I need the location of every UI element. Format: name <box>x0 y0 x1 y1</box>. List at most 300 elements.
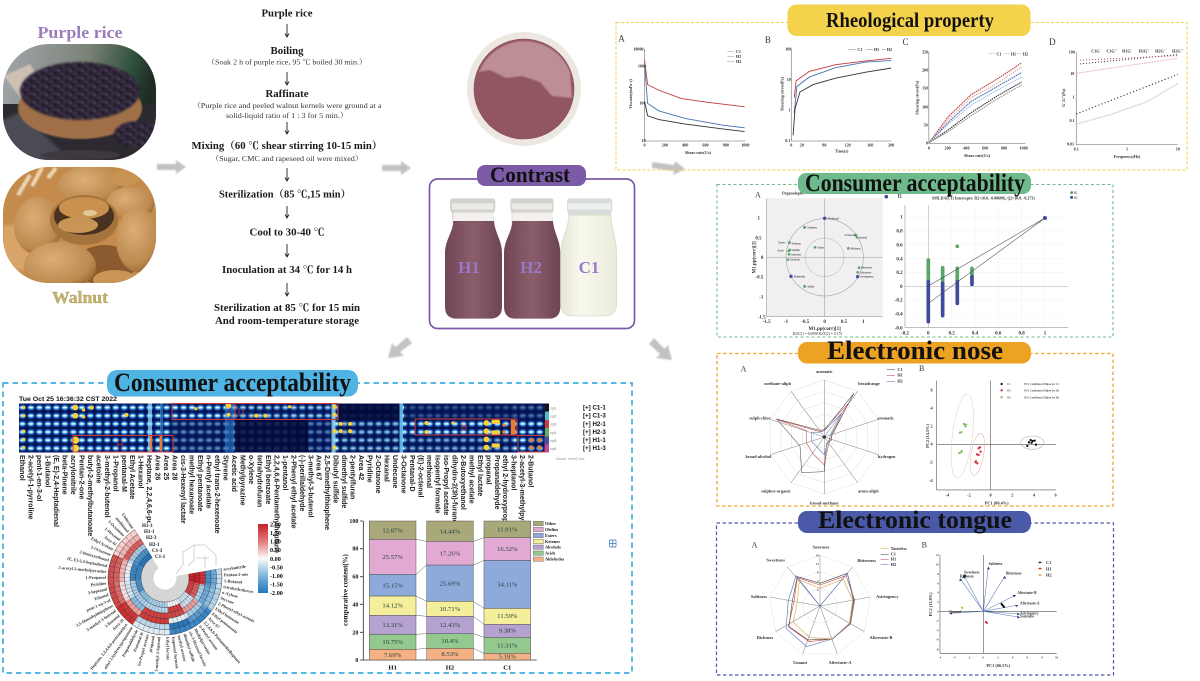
bar value labels: 11.91% <box>497 526 518 533</box>
compound labels around ring: ethyl 2-hydroxypropanoate <box>103 625 134 670</box>
compound labels around ring: methional <box>115 516 131 534</box>
compound labels around ring: propanal <box>148 635 156 653</box>
chart A: viscosity: 10 <box>642 138 646 143</box>
compound labels around ring: Ethyl Acetate <box>90 536 115 552</box>
biplot B: taste PCA: 2 <box>937 600 939 604</box>
colour scale: -2.00 <box>270 590 283 597</box>
sample colour key: spl1 <box>550 406 556 410</box>
compound labels around ring: Ethyl benzoate <box>214 606 240 625</box>
chart B: shearing stress over time: 160 <box>867 143 873 148</box>
scatter plot A: loading plot: -1.5 <box>763 320 771 325</box>
biplot B: taste PCA: -2 <box>968 655 971 659</box>
bar value labels: 16.32% <box>497 546 518 553</box>
compound names under heat map: n-Pentyl acetate <box>204 455 212 509</box>
bar value labels: 14.44% <box>440 528 461 535</box>
compound names under heat map: Hexanal <box>383 455 390 482</box>
chart C: shearing stress over shear rate: 50 <box>924 122 928 127</box>
biplot B: taste PCA: Umami <box>949 610 961 614</box>
colour scale: 0.50 <box>270 547 281 554</box>
colour scale: -1.50 <box>270 582 283 589</box>
compound names under heat map: pent-1-en-3-ol <box>35 455 42 501</box>
arrow: product to rheology <box>652 161 685 175</box>
compound labels around ring: 2-Butanol <box>104 613 121 629</box>
compound names under heat map: tetrahydrofuran <box>255 455 262 507</box>
radar chart A: taste profile: A <box>752 541 758 550</box>
chart C: shearing stress over shear rate: H1 <box>1011 51 1016 56</box>
compound names under heat map: 2-Butoxyethanol <box>459 455 466 510</box>
panel: consumer acceptability, multivariate plots <box>717 170 1113 337</box>
radar chart A: sensor responses: arom-aliph <box>858 488 879 493</box>
scatter plot B: permutation test: 1 <box>900 216 903 221</box>
colour scale: -1.00 <box>270 573 283 580</box>
chart A: viscosity: 400 <box>682 143 688 148</box>
biplot B: taste PCA: Saltiness <box>989 562 1003 566</box>
compound names under heat map: iso-Propyl acetate <box>442 455 449 515</box>
scatter plot B: nose PCA: B <box>919 364 924 373</box>
step: raffinate: solid-liquid ratio of 1 : 3 for 5 min.） <box>226 111 348 120</box>
compound labels around ring: n-Pentyl acetate <box>198 624 219 651</box>
biplot B: taste PCA: -6 <box>936 638 939 642</box>
sample labels: [+] C1-1 <box>583 404 606 412</box>
chart C: shearing stress over shear rate: 200 <box>945 145 951 150</box>
legend: Olefins <box>545 527 559 532</box>
chart C: shearing stress over shear rate: 100 <box>922 104 928 109</box>
scatter plot B: permutation test: 0.4 <box>896 257 903 262</box>
biplot B: taste PCA: H2 <box>1046 573 1051 578</box>
compound names under heat map: Pyridine <box>366 455 373 483</box>
bar value labels: 9.38% <box>499 628 516 635</box>
radar chart A: sensor responses <box>741 365 903 505</box>
flow chart: processing steps <box>192 8 382 327</box>
step: boiling <box>207 46 367 66</box>
sample colour key: Attach: time/2 line <box>556 457 585 461</box>
radar chart A: sensor responses: H1 <box>897 373 903 378</box>
step: raffinate: （Purple rice and peeled walnut kernels were ground at a <box>192 101 382 110</box>
chart A: viscosity: 1000 <box>741 143 749 148</box>
compound names under heat map: 2-pentylfuran <box>349 455 356 499</box>
axes: 80 <box>352 547 358 553</box>
compound labels around ring: 2-Phenyl ethyl acetate <box>217 601 256 624</box>
scatter plot B: nose PCA: 6 <box>1055 492 1058 497</box>
biplot B: taste PCA: 0 <box>937 609 939 613</box>
bar value labels: 25.57% <box>382 554 403 561</box>
chart B: shearing stress over time: 100 <box>785 46 791 51</box>
chart C: shearing stress over shear rate: C1 <box>997 51 1002 56</box>
radar chart A: taste profile: C1 <box>891 552 896 557</box>
compound names under heat map: beta-Pinene <box>60 455 67 495</box>
sector group: right end <box>102 515 228 641</box>
legend: Ketones <box>545 539 560 544</box>
bottle H1 <box>445 198 502 319</box>
radar chart A: sensor responses: broad-methane <box>810 500 839 505</box>
step: boiling: （Soak 2 h of purple rice, 95 ℃ boiled 30 min.） <box>207 58 367 66</box>
scatter plot B: permutation test: R2 <box>1074 192 1078 195</box>
compound names under heat map: 2,5-Dimethylthiophene <box>323 455 330 530</box>
sample ring labels: C1-1 <box>155 555 166 560</box>
scatter plot B: permutation test: -0.2 <box>901 332 909 337</box>
biplot B: taste PCA: Sweetness <box>964 571 980 575</box>
compound labels around ring: 1-Propanol <box>86 575 107 580</box>
bottle C1 <box>561 198 617 316</box>
biplot B: taste PCA: C1 <box>1046 560 1051 565</box>
compound labels around ring: Heptane, 2,2,4,6,6-pentamethyl- <box>89 621 129 671</box>
radar chart A: sensor responses: sulph-chlor <box>749 415 771 420</box>
compound names under heat map: methyl acetate <box>467 455 474 504</box>
scatter plot B: nose PCA: H1 <box>1007 389 1011 392</box>
scatter plot A: loading plot: Umami <box>859 236 867 239</box>
compound names under heat map: Acetic acid <box>230 455 237 492</box>
compound names under heat map: ethyl trans-2-hexenoate <box>213 455 220 534</box>
chart C: shearing stress over shear rate: 250 <box>922 49 928 54</box>
scatter plot A: loading plot: 0 <box>761 256 764 261</box>
chart A: viscosity: 600 <box>702 143 709 148</box>
step: final sterilization and storage: And room-temperature storage <box>215 316 359 327</box>
scatter plot A: loading plot: Richness <box>851 247 861 250</box>
compound labels around ring: Ethyl lactate <box>165 637 171 660</box>
step: raffinate: Raffinate <box>266 89 309 100</box>
compound names under heat map: Ethyl pentanoate <box>196 455 203 512</box>
chart D: modulus over frequency: D <box>1049 37 1056 47</box>
radar chart A: taste profile: Sweetness <box>766 557 785 562</box>
step: purple rice: Purple rice <box>262 8 313 20</box>
arrow: step down <box>285 206 289 218</box>
sample ring labels: H1-3 <box>142 524 153 529</box>
radar chart A: taste profile: 0 <box>817 588 819 592</box>
scatter plot B: nose PCA: 95% Confidence Ellipse for H1 <box>1024 389 1060 392</box>
radar chart A: taste profile: H1 <box>891 557 896 562</box>
compound labels around ring: Area 67 <box>207 616 221 630</box>
sample colour key: spl3 <box>550 422 556 426</box>
axes <box>340 519 537 671</box>
legend: Esters <box>545 533 557 538</box>
chart D: modulus over frequency: C1G'' <box>1106 48 1117 53</box>
bottle labels: H2 <box>520 258 542 277</box>
compound names under heat map: acetoine <box>94 455 101 484</box>
scatter plot B: nose PCA: 4 <box>1033 492 1036 497</box>
compound labels around ring: Undecane <box>121 512 135 530</box>
biplot B: taste PCA: H1 <box>1046 566 1051 571</box>
biplot B: taste PCA: 4 <box>937 591 939 595</box>
arrow: product to right-hand panels <box>649 338 672 360</box>
heading: walnut: Walnut <box>52 288 109 307</box>
chart B: shearing stress over time: C1 <box>857 47 862 52</box>
arrow: step down <box>285 24 289 37</box>
panel: electronic nose <box>717 336 1113 506</box>
scatter plot B: permutation test: 0.6 <box>896 243 903 248</box>
chart C: shearing stress over shear rate: H2 <box>1023 51 1028 56</box>
radar chart A: sensor responses: sulphur-organic <box>761 488 791 493</box>
compound labels around ring: (E, E)-2,4-heptadienal <box>67 556 109 568</box>
sample labels: [+] H2-3 <box>583 429 606 436</box>
radar chart A: sensor responses: broad-alcohol <box>746 454 772 459</box>
bottle labels: C1 <box>579 258 599 277</box>
photo: bowl of product <box>467 32 581 146</box>
compound names under heat map: dimethyl sulfide <box>340 455 347 508</box>
bar value labels: 10.75% <box>382 639 403 646</box>
bar value labels: 11.31% <box>497 642 518 649</box>
compound names under heat map: Ethanol <box>18 455 25 481</box>
scatter plot B: permutation test: -0.4 <box>895 313 903 318</box>
compound labels around ring: methyl acetate <box>177 635 187 662</box>
chart A: viscosity: 100 <box>639 101 646 106</box>
scatter plot B: permutation test: 0.8 <box>1019 332 1025 337</box>
chart D: modulus over frequency: 0.1 <box>1074 146 1079 151</box>
arrow: step down <box>285 122 289 134</box>
axes: 60 <box>352 575 358 581</box>
circular heat map <box>58 502 283 672</box>
arrow: step down <box>285 168 289 181</box>
scatter plot A: loading plot: Ketones <box>792 242 801 245</box>
bar value labels: 11.59% <box>497 613 518 620</box>
scatter plot B: nose PCA: 2 <box>1011 492 1013 497</box>
chart D: modulus over frequency: H1G' <box>1122 48 1132 53</box>
compound names under heat map: Styrene <box>222 455 228 481</box>
sample ring labels: H2-1 <box>149 543 160 548</box>
scatter plot B: permutation test: 1 <box>1044 332 1047 337</box>
compound names under heat map: Dibutyl sulfide <box>332 455 339 503</box>
compound names under heat map: Ethyl lactate <box>476 455 483 496</box>
scatter plot B: permutation test: 0.6 <box>995 332 1002 337</box>
chart B: shearing stress over time: 0.1 <box>785 138 790 143</box>
legend: Alcohols <box>545 545 561 550</box>
biplot B: taste PCA: 8 <box>937 572 939 576</box>
bar value labels: 34.11% <box>497 581 518 588</box>
compound names under heat map: Ethyl Acetate <box>128 455 135 499</box>
chart D: modulus over frequency: 10 <box>1176 146 1180 151</box>
sample ring labels <box>142 524 166 560</box>
compound names under heat map: Area 67 <box>315 455 322 480</box>
step: final sterilization and storage <box>214 302 360 327</box>
compound labels around ring: 3-methyl-2-butenol <box>154 636 161 672</box>
sample ring labels: H2-3 <box>146 536 157 541</box>
biplot B: taste PCA: -4 <box>936 628 939 632</box>
scatter plot A: loading plot <box>753 190 888 336</box>
charts: rheology curves <box>618 33 1183 159</box>
compound names under heat map: Undecane <box>391 455 398 489</box>
compound names under heat map: Pentan-2-one <box>77 455 84 499</box>
scatter plot A: loading plot: Alcohols <box>790 259 800 262</box>
radar chart A: taste profile: 12 <box>816 562 819 566</box>
legend <box>533 521 565 562</box>
radar chart A: sensor responses: broadrange <box>858 381 880 386</box>
axes: C1 <box>503 664 511 671</box>
scatter plot A: loading plot: 0.5 <box>841 320 848 325</box>
biplot B: taste PCA: 0 <box>983 655 985 659</box>
colour scale: -0.50 <box>270 564 283 571</box>
chart D: modulus over frequency: 1 <box>1072 95 1075 100</box>
bar value labels: 12.43% <box>440 622 461 629</box>
chart A: viscosity: A <box>618 33 625 43</box>
compound names under heat map: Area 42 <box>357 455 364 480</box>
scatter plot A: loading plot: Sweetness <box>845 234 856 237</box>
compound labels around ring: Pentanal-D <box>132 631 144 653</box>
scatter plot B: nose PCA: -2 <box>967 492 971 497</box>
scatter plot B: nose PCA: 6 <box>930 387 933 392</box>
chart B: shearing stress over time: B <box>765 35 771 45</box>
gallery plot: GC-IMS fingerprint heat map <box>19 403 545 453</box>
bottle labels: H1 <box>458 258 480 277</box>
chart D: modulus over frequency: H2G' <box>1155 48 1165 53</box>
scatter plot A: loading plot: Astringency <box>860 276 874 279</box>
radar chart A: taste profile: Aftertaste-A <box>828 660 852 665</box>
axes: H1 <box>388 664 397 671</box>
radar chart A: taste profile: 8 <box>817 570 819 574</box>
compound names under heat map: (-)-perillaldehyde <box>298 455 305 512</box>
radar chart A: taste profile: 4 <box>817 579 819 583</box>
axes: 100 <box>349 519 358 525</box>
compound labels around ring: Ethyl pentanoate <box>211 611 239 634</box>
photo: walnuts in basket <box>3 166 160 290</box>
scatter plot B: nose PCA: 95% Confidence Ellipse for H2 <box>1024 396 1060 399</box>
scatter plot A: loading plot: -0.5 <box>801 320 810 325</box>
chart D: modulus over frequency: C1G' <box>1091 48 1101 53</box>
scatter plot B: nose PCA: 2 <box>930 424 933 429</box>
legend: Aldehydes <box>545 557 565 562</box>
chart B: shearing stress over time: 1 <box>788 107 790 112</box>
chart A: viscosity: 800 <box>723 143 729 148</box>
compound labels around ring: tetrahydrofuran <box>223 584 254 594</box>
scatter plot B: nose PCA: -2 <box>929 460 933 465</box>
chart B: shearing stress over time: H2 <box>887 47 892 52</box>
compound names under heat map: 1-pentanol <box>281 455 288 490</box>
chart B: shearing stress over time: 80 <box>822 143 826 148</box>
chart A: viscosity: 10000 <box>633 46 644 51</box>
bar value labels: 25.69% <box>440 580 461 587</box>
chart C: shearing stress over shear rate: 0 <box>928 145 930 150</box>
compound names under heat map: o-Xylene <box>247 455 254 484</box>
compound labels around ring: 2-acetyl-3-methylpyrazine <box>58 565 107 574</box>
compound labels around ring: 3-Octanone <box>107 519 126 537</box>
radar chart A: taste profile: H2 <box>891 562 896 567</box>
scatter plot B: permutation test <box>895 191 1078 337</box>
scatter plot A: loading plot: 1 <box>757 216 760 221</box>
scatter plot B: nose PCA: 4 <box>930 405 933 410</box>
chart C: shearing stress over shear rate: 200 <box>922 67 928 72</box>
axes: 0 <box>355 658 358 664</box>
bar value labels: 5.18% <box>499 654 516 661</box>
compound names under heat map: Pentanal-D <box>408 455 415 492</box>
chart B: shearing stress over time: 10 <box>787 77 791 82</box>
compound labels around ring: Area 26 <box>111 617 125 631</box>
scatter plot A: loading plot: Saltiness <box>807 226 817 229</box>
scatter plot B: nose PCA: C1 <box>1007 383 1011 386</box>
chart C: shearing stress over shear rate: 600 <box>982 145 988 150</box>
compound names under heat map: 2-acetyl-3-methylpyrazine <box>518 455 525 541</box>
compound labels around ring: o-Xylene <box>222 590 239 599</box>
radar chart A: taste profile: Bitterness <box>857 558 876 563</box>
compound labels around ring: dimethyl sulfide <box>182 633 196 663</box>
chart A: viscosity: Viscosity(mPa·s) <box>628 79 633 109</box>
label: rheological property <box>788 4 1030 36</box>
compound names under heat map: 3-methyl-2-butenol <box>103 455 110 518</box>
biplot B: taste PCA: Richness <box>960 574 974 578</box>
compound labels around ring: Styrene <box>220 595 235 605</box>
stacked bar chart: comparative content <box>340 519 565 671</box>
bar value labels: 15.15% <box>382 582 403 589</box>
colour scale: 1.50 <box>270 530 281 537</box>
bar value labels: 14.12% <box>382 603 403 610</box>
compound names under heat map: Isopentyl formate <box>433 455 440 513</box>
biplot B: taste PCA: 6 <box>1027 655 1029 659</box>
compound names under heat map: 1-Hexanol <box>137 455 144 489</box>
chart B: shearing stress over time: Shearing stress(Pa) <box>780 76 785 111</box>
scatter plot B: nose PCA: PC2 (14.5%) <box>925 424 930 448</box>
bar value labels: 17.26% <box>440 550 461 557</box>
arrow: process to product <box>382 161 411 175</box>
biplot B: taste PCA: B <box>922 541 927 550</box>
label: rheological property: Rheological property <box>826 8 994 32</box>
biplot B: taste PCA: Bitterness <box>1006 572 1022 576</box>
chart C: shearing stress over shear rate: Shearing stress(Pa) <box>914 80 919 115</box>
radar chart A: sensor responses: hydrogen <box>878 454 896 459</box>
scatter plot A: loading plot: Aftertaste <box>860 271 872 274</box>
biplot B: taste PCA: 6 <box>937 581 939 585</box>
chart C: shearing stress over shear rate: 1000 <box>1019 145 1028 150</box>
step: cooling: Cool to 30-40 ℃ <box>250 226 324 238</box>
compound names under heat map: Ethyl benzoate <box>264 455 271 505</box>
sample labels: [+] H2-1 <box>583 421 606 428</box>
compound names under heat map: acrylonitrile <box>69 455 76 495</box>
scatter plot A: loading plot: -0.5 <box>755 276 764 281</box>
dendrogram <box>176 545 216 574</box>
panel: volatile compounds, consumer acceptability <box>3 368 632 673</box>
compound names under heat map: Methylpyrazine <box>238 455 245 506</box>
step: mixing <box>192 140 382 163</box>
scatter plot B: permutation test: B <box>897 193 902 200</box>
sample colour key <box>545 404 585 461</box>
icon: small table symbol <box>610 540 616 547</box>
compound labels around ring: 2-Octanone <box>90 544 112 557</box>
biplot B: taste PCA: 12 <box>936 553 939 557</box>
biplot B: taste PCA: 2 <box>997 655 999 659</box>
biplot B: taste PCA: 4 <box>1012 655 1014 659</box>
sample labels: [+] C1-3 <box>583 412 606 420</box>
step: boiling: Boiling <box>270 46 304 57</box>
radar chart A: taste profile: Astringency <box>876 594 899 599</box>
compound names under heat map: 2-Octanone <box>374 455 381 494</box>
radar chart A: taste profile: Sourness <box>813 545 830 550</box>
biplot B: taste PCA: Astringency <box>1020 611 1039 615</box>
scatter plot B: permutation test: Q2 <box>1074 196 1078 199</box>
compound names under heat map: 1-Propanol <box>111 455 118 492</box>
arrow: step down <box>285 283 289 296</box>
label: contrast: Contrast <box>490 162 571 187</box>
compound labels around ring: acrylonitrile <box>223 564 246 572</box>
scatter plot A: loading plot: -1 <box>759 296 764 301</box>
compound names under heat map: Area 28 <box>171 455 178 480</box>
step: final sterilization and storage: Sterilization at 85 ℃ for 15 min <box>214 302 360 314</box>
scatter plot A: loading plot: 1 <box>862 320 865 325</box>
compound names under heat map: 2-Butanol <box>527 455 534 487</box>
chart C: shearing stress over shear rate: 150 <box>922 85 928 90</box>
axes: 20 <box>352 630 358 636</box>
legend: Acids <box>545 551 556 556</box>
panel: contrast <box>430 162 634 328</box>
chart B: shearing stress over time: 200 <box>888 143 894 148</box>
bar value labels: 8.53% <box>441 651 459 658</box>
biplot B: taste PCA: Sourness <box>1020 615 1035 619</box>
arrow: product to consumer panel <box>388 337 412 358</box>
panel: rheological property <box>616 4 1187 170</box>
scatter plot B: nose PCA: 95% Confidence Ellipse for C1 <box>1024 383 1060 386</box>
chart D: modulus over frequency: 10 <box>1070 71 1074 76</box>
bar H1 <box>369 521 416 660</box>
bar value labels: 10.71% <box>440 606 461 613</box>
scatter plot B: permutation test: -0.6 <box>895 326 903 331</box>
chart B: shearing stress over time: H1 <box>874 47 879 52</box>
compound labels around ring: pent-1-en-3-ol <box>86 597 112 613</box>
arrow: step down <box>285 72 289 85</box>
